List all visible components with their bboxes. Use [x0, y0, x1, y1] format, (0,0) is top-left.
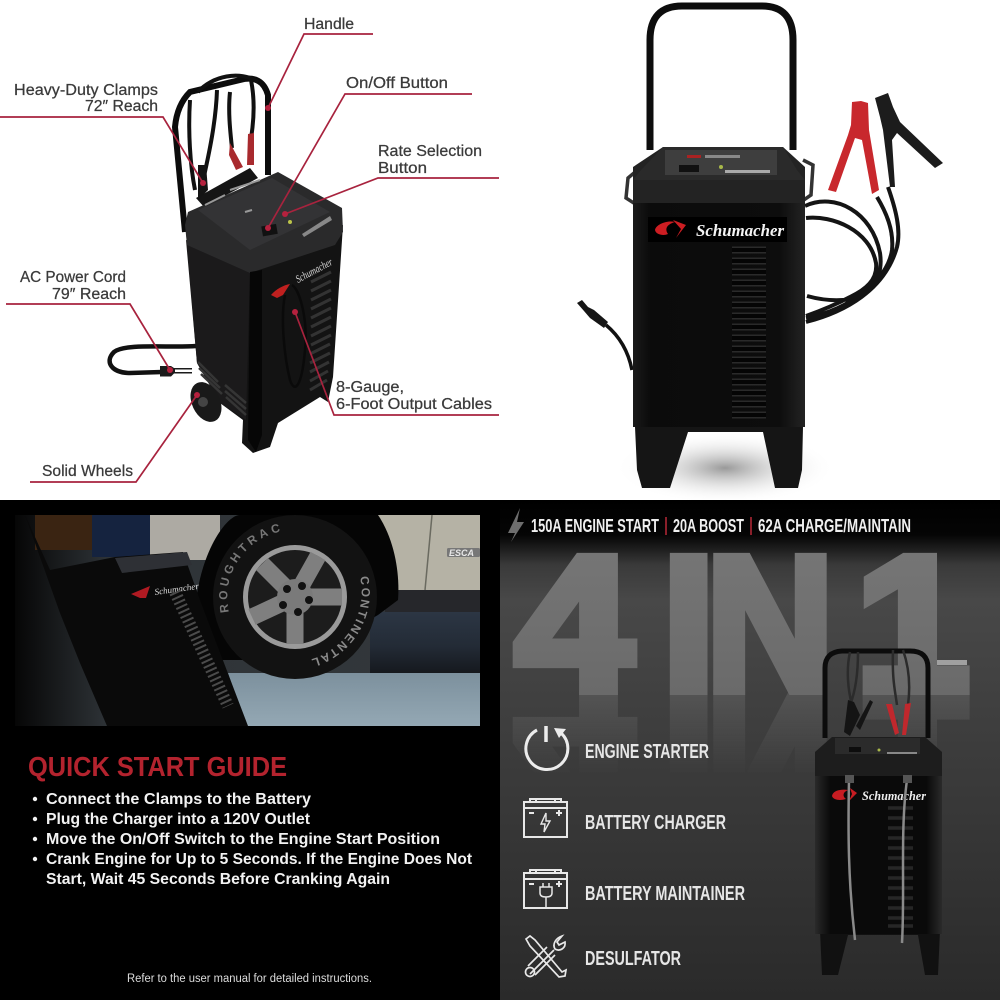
- cable hooks: [845, 775, 912, 783]
- feature: desulfator: [526, 936, 681, 977]
- control panel: [198, 178, 330, 250]
- ground shadow under car: [370, 612, 480, 674]
- control panel: [665, 150, 777, 175]
- lid top: [835, 738, 920, 754]
- headline reflection: N: [706, 654, 834, 869]
- feature: desulfator: DESULFATOR: [585, 947, 681, 970]
- feature: battery charger: [524, 799, 726, 837]
- spec line: [531, 516, 911, 536]
- power cord: [110, 346, 196, 373]
- headline reflection: 1: [855, 654, 970, 869]
- background shelves: [35, 515, 95, 550]
- instructions list: Crank Engine for Up to 5 Seconds. If the Engine Does Not: [46, 851, 473, 868]
- legs: [635, 427, 803, 488]
- black clamp: [875, 93, 943, 187]
- power cord: [606, 325, 632, 370]
- feature: battery maintainer: [524, 870, 745, 908]
- callout: clamps: Heavy-Duty Clamps: [14, 82, 158, 99]
- callout: wheels: [30, 392, 200, 482]
- headline bevel highlights: [937, 660, 967, 665]
- car body: [375, 515, 480, 592]
- logo: [832, 788, 927, 803]
- black clamp: [198, 165, 208, 200]
- instructions list: Plug the Charger into a 120V Outlet: [46, 811, 311, 828]
- feature: engine starter: ENGINE STARTER: [585, 740, 709, 763]
- logo band: Schumacher: [696, 221, 784, 240]
- black clamp: [844, 700, 873, 736]
- feature: battery charger: BATTERY CHARGER: [585, 811, 726, 834]
- front gloss: [248, 270, 262, 452]
- front vents: [310, 272, 331, 390]
- handle: [825, 651, 928, 738]
- lid: [185, 172, 343, 273]
- handle: [175, 79, 268, 232]
- cabinet: [815, 772, 942, 934]
- lid: [815, 737, 942, 776]
- panel: 4 in 1 features: [500, 500, 1000, 1000]
- hanging cables: [189, 76, 258, 190]
- callout: handle: Handle: [304, 16, 354, 33]
- front cables: [283, 285, 306, 387]
- cable bundle: [196, 168, 258, 207]
- logo band: [648, 217, 787, 242]
- icon: battery bolt: [524, 799, 567, 837]
- lid top: [633, 147, 805, 180]
- icon: crossed tools: [526, 936, 566, 977]
- spec line: 62A CHARGE/MAINTAIN: [758, 516, 911, 536]
- logo: Schumacher: [154, 581, 200, 597]
- product photo: [815, 650, 942, 975]
- callout: rate selection: [282, 143, 499, 217]
- lid: [633, 147, 805, 203]
- spec line: 20A BOOST: [673, 516, 744, 536]
- vents: [175, 592, 228, 706]
- feature: engine starter: [526, 726, 709, 770]
- logo: Schumacher: [294, 256, 335, 286]
- callout: AC power cord: 79″ Reach: [52, 286, 126, 303]
- charger foreground: [25, 515, 248, 726]
- charger lid edge: [115, 552, 192, 573]
- icon: battery plug: [524, 870, 567, 908]
- photo: charger beside SUV wheel: [20, 514, 480, 726]
- callout: on/off button: On/Off Button: [346, 75, 448, 92]
- spokes: [252, 556, 342, 644]
- callout: on/off button: [265, 75, 472, 231]
- callout: handle: [265, 16, 373, 111]
- wheel arch: [195, 515, 398, 660]
- badge: ESCA: [449, 548, 474, 558]
- left face: [186, 240, 250, 420]
- instructions list: Start, Wait 45 Seconds Before Cranking Again: [46, 871, 390, 888]
- callout: wheels: Solid Wheels: [42, 463, 133, 480]
- tire lettering: [219, 524, 370, 666]
- icon: lightning bolt: [508, 508, 524, 542]
- lug nuts: [283, 586, 309, 612]
- instructions list: Connect the Clamps to the Battery: [46, 791, 311, 808]
- instructions list: [33, 791, 473, 888]
- gray cables: [849, 780, 907, 943]
- rocker: [385, 590, 480, 616]
- feature: battery maintainer: BATTERY MAINTAINER: [585, 882, 745, 905]
- logo: [271, 256, 335, 298]
- headline 4 IN 1: N: [706, 516, 834, 731]
- callout: AC power cord: [6, 269, 173, 373]
- plug: [160, 366, 192, 376]
- hanging cables: [848, 650, 909, 705]
- callout: rate selection: Rate Selection: [378, 143, 482, 160]
- icon: power: [526, 726, 568, 770]
- headline reflection: 4: [515, 654, 633, 869]
- callout: rate selection: Button: [378, 160, 427, 177]
- headline 4 IN 1: I: [662, 516, 715, 731]
- plug: [577, 300, 608, 328]
- headline 4 IN 1: [515, 516, 970, 731]
- tire lettering: CONTINENTAL: [312, 576, 370, 666]
- headline reflection: I: [662, 654, 715, 869]
- callout: output cables: [292, 309, 499, 415]
- panel: front product view: [500, 0, 1000, 504]
- legs: [820, 930, 940, 975]
- control panel: [849, 747, 917, 754]
- headline reflection: [512, 693, 970, 741]
- rim: [243, 545, 347, 649]
- headline 4 IN 1: 1: [855, 516, 970, 731]
- panel: feature callouts: [0, 0, 500, 500]
- callout: clamps: 72″ Reach: [85, 98, 158, 115]
- output cables: [805, 187, 898, 322]
- callout: output cables: 6-Foot Output Cables: [336, 396, 492, 413]
- wheel: [184, 377, 228, 427]
- handle: [650, 6, 793, 150]
- body: [186, 225, 343, 453]
- heading: QUICK START GUIDE: [28, 751, 287, 782]
- headline 4 IN 1: 4: [515, 516, 633, 731]
- side hooks: [626, 160, 813, 211]
- panel label and switch: [205, 180, 332, 237]
- cabinet: [633, 203, 805, 427]
- door seam: [425, 515, 432, 590]
- callout: AC power cord: AC Power Cord: [20, 269, 126, 286]
- footnote: Refer to the user manual for detailed instructions.: [127, 973, 372, 985]
- tire: [213, 515, 377, 679]
- vents: [888, 808, 913, 926]
- panel: quick start guide: [0, 500, 500, 1000]
- red clamp: [828, 101, 879, 194]
- red clamps: [229, 133, 254, 170]
- tire lettering: ROUGHTRAC: [219, 524, 280, 613]
- charger angled view: [110, 76, 343, 453]
- front vents: [732, 250, 766, 415]
- logo: Schumacher: [862, 788, 927, 803]
- callout: clamps: [0, 82, 206, 186]
- red clamps: [886, 703, 911, 735]
- left face vents: [198, 362, 246, 415]
- instructions list: Move the On/Off Switch to the Engine Start Position: [46, 831, 440, 848]
- floor: [228, 673, 480, 726]
- logo: [131, 581, 200, 598]
- callout: output cables: 8-Gauge,: [336, 379, 404, 396]
- spec line: 150A ENGINE START: [531, 516, 659, 536]
- floor shadow: [615, 432, 835, 504]
